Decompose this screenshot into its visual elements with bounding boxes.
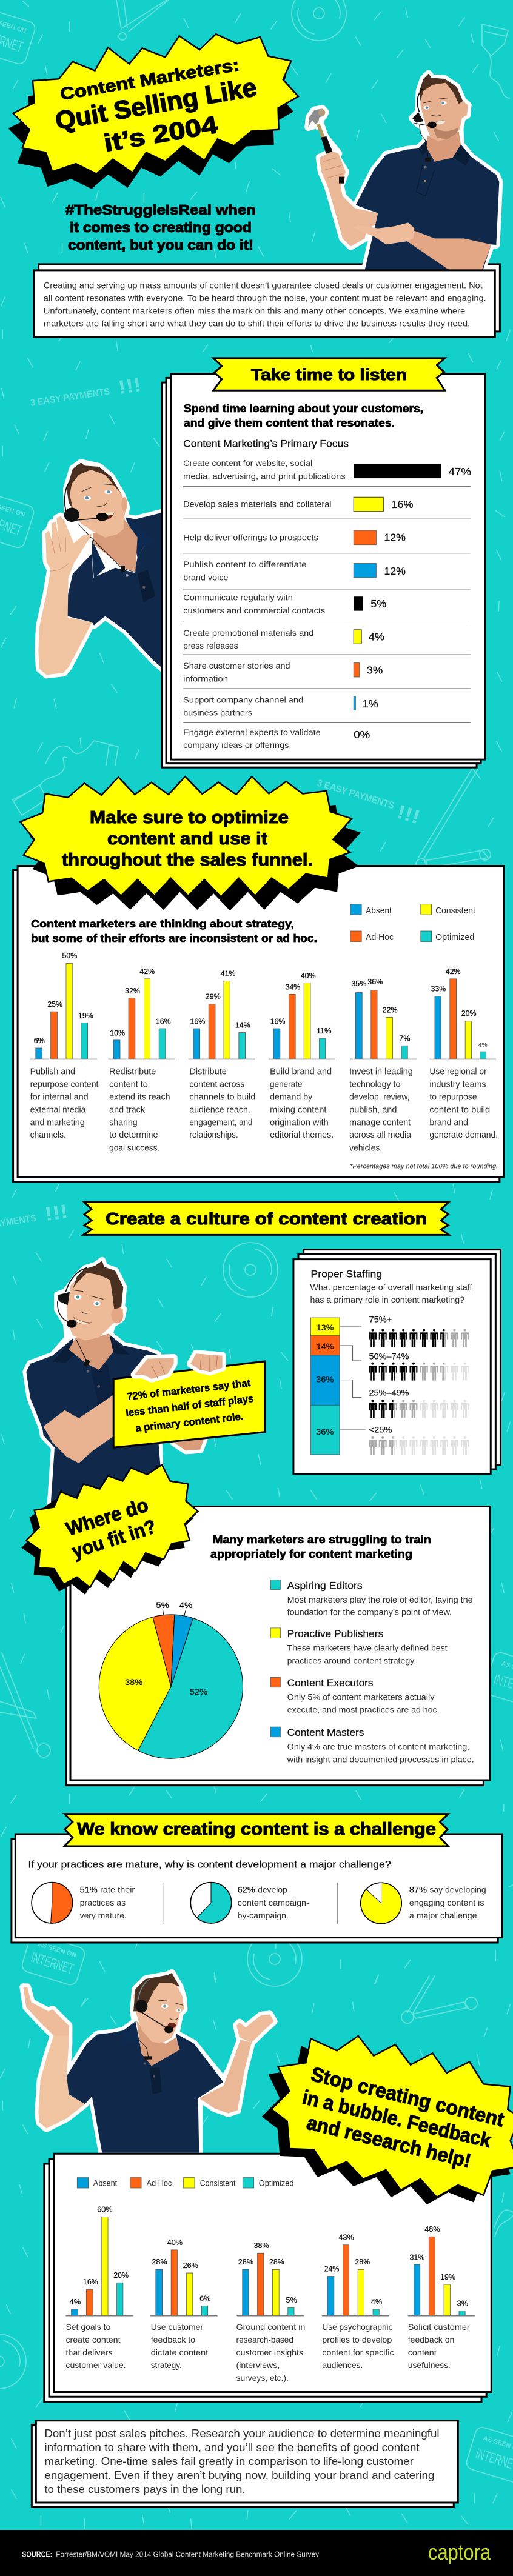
bar chart: focus rows: 12% [384,566,406,577]
chart value labels: 40% [301,972,316,981]
value labels: 38% [254,2241,269,2250]
value labels: 4% [371,2298,382,2306]
footer [0,2530,513,2576]
photo: man listening [38,462,168,675]
icon row: 25 to 49 percent people [369,1400,469,1418]
legend with descriptions: Only 5% of content marketers actually [287,1692,435,1702]
subheading: content marketers strategy [31,918,317,944]
source line: SOURCE: [22,2550,52,2559]
value labels: 3% [457,2299,468,2308]
icon: scooters [0,0,491,2023]
heading banner [213,358,445,390]
chart descriptions: feedback to [151,2335,195,2344]
bar chart: focus rows: Support company channel and [183,696,303,705]
folded arm [44,1395,113,1463]
stat: 51 percent [80,1885,135,1920]
lower arm and hand [407,230,491,270]
chart value labels: 42% [139,967,155,976]
raised arm and fist [320,151,378,247]
chart value labels: 35% [351,979,367,989]
chart value labels [34,952,488,1049]
bar chart: focus rows: Create promotional materials and [183,629,314,638]
chart descriptions: research-based [236,2335,293,2344]
panel: closing text [32,2421,458,2507]
chart descriptions: audience reach, [189,1106,250,1115]
value labels: 20% [113,2271,129,2280]
icon row: 50 to 74 percent people [369,1363,469,1381]
hammer [317,124,325,138]
bar chart: focus rows: Publish content to differentiate [183,561,307,570]
legend: Optimized [435,932,474,943]
chart descriptions: content across [189,1080,245,1089]
chart descriptions: that delivers [65,2347,113,2357]
bar chart: focus rows: media, advertising, and print publications [183,472,346,481]
legend: Absent [93,2178,118,2188]
title text: Quit Selling Like [53,73,259,135]
chart descriptions: channels. [30,1130,66,1140]
heading: we know creating content: We know creating content is a challenge [77,1820,436,1839]
chart descriptions: technology to [349,1080,401,1089]
sign text [125,1377,254,1434]
chart descriptions: publish, and [349,1106,397,1115]
legend with descriptions: Content Masters [287,1727,364,1738]
icon: three easy payments stamps: !!! [43,1200,69,1225]
shirt [67,2021,223,2153]
chart value labels: 14% [235,1021,250,1030]
chart descriptions: Redistribute [109,1067,156,1076]
section: where do you fit in [21,1465,490,1786]
heading: create a culture: Create a culture of content creation [106,1209,427,1228]
legend with descriptions: Content Executors [287,1677,374,1689]
shirt [26,1335,164,1507]
chart descriptions: Use regional or [429,1067,487,1076]
banner: create a culture [84,1202,449,1235]
stat: 62 percent: content campaign- [238,1898,309,1907]
pie labels: 4% [179,1600,192,1610]
chart descriptions: Set goals to [65,2322,110,2332]
chart value labels: 20% [461,1009,477,1018]
chart value labels: 32% [125,987,140,996]
burst headline: Make sure to optimize [90,808,289,827]
chart descriptions: editorial themes. [270,1130,334,1140]
chart value labels: 25% [47,1000,62,1009]
section: take time to listen [38,358,485,767]
stacked bar: 13% [317,1323,334,1332]
chart descriptions: Solicit customer [408,2322,470,2332]
title text [53,55,259,157]
chart descriptions: strategy. [151,2360,182,2370]
bar chart: focus rows: brand voice [183,573,229,582]
burst headline: throughout the sales funnel. [62,850,313,870]
burst text: and research help! [304,2111,473,2172]
legend with descriptions: Proactive Publishers [287,1628,383,1640]
stat: 62 percent: by-campaign. [238,1910,289,1920]
legend [77,2178,293,2188]
chart descriptions: brand and [429,1118,468,1127]
chart descriptions: Use psychographic [322,2322,392,2332]
bar charts: five feedback groups [65,2205,475,2383]
row labels [369,1315,409,1434]
pie: 87 percent [361,1883,401,1924]
source line [22,2550,319,2559]
chart descriptions: repurpose content [30,1080,99,1089]
pie labels: 5% [156,1600,169,1610]
panel: intro backing sheet [39,264,500,332]
chart descriptions: generate demand. [429,1130,498,1140]
sign text: 72% of marketers say that [126,1377,251,1403]
pie labels [156,1600,192,1616]
icon: three easy payments stamps: 3 EASY PAYMENTS [30,387,110,409]
banner [64,1814,448,1846]
legend: Absent [366,906,392,916]
chart value labels: 7% [399,1035,411,1043]
bar chart: focus rows: Create content for website, social [183,459,312,469]
chart descriptions: content to [109,1080,148,1089]
chart descriptions: manage content [349,1118,411,1127]
chart value labels: 41% [221,969,236,978]
photo: man holding sign [26,1261,204,1507]
value labels: 19% [440,2273,455,2281]
heading: many marketers struggling [210,1533,431,1560]
burst text: Where do [63,1493,151,1540]
chart value labels: 16% [156,1017,171,1026]
chart descriptions: and marketing [30,1118,85,1127]
chart value labels: 36% [367,978,383,987]
stat: 51 percent: rate their [100,1885,135,1895]
icon: three easy payments stamps: 3 EASY PAYMENTS [316,778,395,812]
chart descriptions: Invest in leading [349,1067,413,1076]
stat: 51 percent: very mature. [80,1910,127,1920]
icon: three easy payments stamps [0,373,423,1238]
burst text: you fit in? [69,1515,158,1563]
value labels: 24% [324,2264,339,2273]
hashtag subheading: #TheStruggleIsReal when [65,202,256,218]
chart value labels: 50% [62,952,78,961]
bar chart: focus rows: Engage external experts to validate [183,728,321,737]
row labels: <25% [369,1425,392,1434]
chart descriptions: Use customer [151,2322,203,2332]
bar chart: focus rows: 5% [370,598,386,610]
head [133,1979,184,2044]
heading: many marketers struggling: Many marketers are struggling to train [213,1533,431,1546]
icon row: 75 percent plus people [369,1329,469,1347]
bar chart: focus rows: Communicate regularly with [183,593,293,602]
chart value labels: 16% [190,1017,206,1026]
bar chart: focus rows: Develop sales materials and collateral [183,500,332,509]
stat: 62 percent: develop [258,1885,287,1895]
subheading: content marketers strategy: Content marketers are thinking about strategy, [31,918,294,930]
headset [138,1979,150,1999]
chart descriptions: (interviews, [236,2360,280,2370]
stat: 87 percent [409,1885,486,1920]
bar chart: focus rows: 0% [354,729,370,741]
staffing heading: Proper Staffing [311,1268,382,1280]
stat: 62 percent [238,1885,309,1920]
value labels: 5% [286,2296,297,2304]
chart descriptions: generate [270,1080,303,1089]
burst headline: content and use it [107,829,267,849]
chart descriptions: create content [65,2335,121,2344]
neck [426,132,461,162]
headset [417,89,423,112]
burst text [63,1493,158,1563]
value labels: 43% [338,2233,354,2242]
icon: as seen on internet stamps: AS SEEN ON [37,1941,77,1959]
value labels: 60% [97,2205,113,2214]
chart value labels: 33% [431,984,446,993]
chart descriptions: relationships. [189,1130,238,1140]
chart descriptions: Build brand and [270,1067,332,1076]
chart descriptions: and track [109,1106,145,1115]
subheading: spend time learning: Spend time learning about your customers, [184,402,423,415]
hashtag subheading: content, but you can do it! [68,237,253,253]
panel: feedback chart sheet [44,2154,491,2402]
chart descriptions: content for specific [322,2347,394,2357]
value labels: 4% [69,2298,81,2306]
bar chart: focus rows: 47% [449,466,471,478]
stat: 87 percent: 87% [409,1885,427,1895]
chart descriptions: across all media [349,1130,411,1140]
value labels [69,2205,468,2308]
legend: Ad Hoc [147,2178,172,2188]
chart descriptions: dictate content [151,2347,208,2357]
title text: it’s 2004 [102,112,220,157]
logo: captora: captora [428,2540,491,2564]
optimize burst [20,776,361,910]
chart descriptions: audiences. [322,2360,363,2370]
stat: 62 percent: 62% [238,1885,255,1895]
photo: man with hammer [308,74,499,270]
photo: man shrugging [23,1973,274,2153]
shirt [356,141,499,270]
chart descriptions: mixing content [270,1106,327,1115]
head [68,470,126,538]
stat: 51 percent: 51% [80,1885,98,1895]
row labels: 25%–49% [369,1388,409,1398]
icon: three easy payments stamps: !!! [116,373,142,398]
panel: proper staffing [293,1250,500,1474]
stacked bar: 36% [316,1375,334,1384]
chart descriptions: demand by [270,1092,312,1102]
stacked bar: 36% [316,1427,334,1436]
bar chart: focus rows: 4% [369,632,384,643]
shirt [67,511,168,673]
chart value labels: 29% [206,992,221,1001]
panel: closing text: to these customers pays in the long run. [44,2483,246,2495]
icon: three easy payments stamps: !!! [394,801,423,828]
row labels: 75%+ [369,1315,392,1324]
chart value labels: 10% [110,1029,125,1038]
burst headline [62,808,313,870]
value labels: 26% [183,2261,198,2270]
legend: Ad Hoc [366,932,394,943]
chart value labels: 34% [285,983,301,992]
bar chart: focus rows: customers and commercial contacts [183,606,325,616]
chart value labels: 16% [270,1017,286,1026]
panel: intro text [34,270,495,337]
legend: Consistent [435,906,475,916]
chart descriptions: engagement, and [189,1118,252,1127]
bar chart: focus rows: information [183,675,228,684]
bar chart: focus rows: 12% [384,532,406,544]
chart descriptions: content [408,2347,437,2357]
title text: Content Marketers: [59,55,241,104]
value labels: 28% [238,2258,253,2266]
sign: 72 percent callout [113,1353,265,1447]
hands gripping sign [135,1353,223,1379]
section: culture of content creation [26,1202,500,1507]
chart value labels: 22% [383,1006,398,1015]
panel: challenge sheet [12,1814,502,1943]
chart descriptions: channels to build [189,1092,255,1102]
legend: Consistent [200,2178,236,2188]
pie slice labels [125,1677,207,1697]
neck [93,519,138,572]
legend [350,904,475,943]
panel: maturity sheet [67,1506,490,1786]
value labels: 16% [83,2278,98,2286]
burst text [300,2063,506,2172]
chart descriptions: Publish and [30,1067,75,1076]
icon: as seen on internet stamps: INTERNET [29,1949,76,1978]
stacked bar: 14% [317,1341,334,1351]
chart value labels: 19% [78,1012,93,1021]
pie slice labels: 52% [190,1687,207,1697]
subheading: spend time learning: and give them content that resonates. [184,417,395,429]
bar chart: focus rows [183,459,471,750]
neck [136,2020,180,2066]
chart descriptions: to repurpose [429,1092,477,1102]
chart descriptions [65,2322,470,2383]
chart descriptions: content to build [429,1106,490,1115]
value labels: 28% [269,2258,284,2266]
staffing heading [310,1268,472,1304]
icon: discs [0,0,346,2389]
section: optimize content [13,776,504,1182]
stat: 51 percent: practices as [80,1898,126,1907]
chart value labels: 4% [478,1042,488,1049]
pie chart: marketer types [99,1615,243,1758]
panel: primary focus chart sheet [162,358,485,767]
arm and hand [38,516,93,675]
value labels: 31% [409,2253,424,2261]
value labels: 6% [200,2294,210,2303]
bar charts: six strategy groups [36,963,486,1059]
chart descriptions: surveys, etc.). [236,2373,289,2383]
hashtag subheading: it comes to creating good [70,219,252,235]
stop creating burst [262,2036,513,2204]
stacked bar [311,1318,340,1455]
subheading: content marketers strategy: but some of their efforts are inconsistent or ad hoc. [31,932,317,944]
head [420,81,468,141]
panel: strategy chart sheet [13,866,504,1182]
pie slice labels: 38% [125,1677,142,1687]
legend: Optimized [259,2178,293,2188]
head [67,1269,123,1341]
heading: take time to listen: Take time to listen [251,365,407,384]
value labels: 28% [355,2258,370,2266]
chart descriptions: extend its reach [109,1092,170,1102]
burst text: Stop creating content [309,2063,506,2131]
chart value labels: 6% [34,1036,45,1046]
legend with descriptions: practices around content strategy. [287,1656,416,1665]
headset [65,1268,87,1292]
connectors [340,1327,366,1430]
bar chart: focus rows: press releases [183,642,238,651]
chart descriptions: feedback on [408,2335,454,2344]
chart descriptions: sharing [109,1118,138,1127]
title burst [8,34,298,189]
chart descriptions [30,1067,498,1153]
lower hand [174,1438,204,1450]
sign text: a primary content role. [135,1410,244,1434]
legend with descriptions: Aspiring Editors [287,1580,363,1591]
chart descriptions: develop, review, [349,1092,409,1102]
bar chart: focus rows: company ideas or offerings [183,741,289,750]
chart descriptions: customer value. [65,2360,126,2370]
sign text: less than half of staff plays [125,1393,254,1419]
subheading: spend time learning [184,402,423,429]
bar chart: focus rows: 1% [363,698,378,710]
section: feedback and research [23,1973,513,2507]
bar chart: focus rows: 16% [392,499,413,510]
bar chart: focus rows: business partners [183,709,252,718]
bar chart: focus rows: Share customer stories and [183,662,290,671]
chart descriptions: Distribute [189,1067,227,1076]
headset [65,482,70,513]
chart descriptions: usefulness. [408,2360,451,2370]
chart descriptions: industry teams [429,1080,486,1089]
value labels: 48% [424,2225,440,2234]
section: creating content is a challenge [12,1814,502,1943]
source line: Forrester/BMA/OMI May 2014 Global Content Marketing Benchmark Online Survey [56,2550,319,2559]
pie: 62 percent [190,1883,232,1923]
neck [69,1333,113,1370]
chart descriptions: origination with [270,1118,329,1127]
chart descriptions: profiles to develop [322,2335,392,2344]
dividers [164,1883,337,1924]
legend with descriptions [270,1580,474,1764]
hashtag subheading [65,202,256,253]
pie: 51 percent [32,1883,73,1923]
chart descriptions: for internal and [30,1092,89,1102]
chart descriptions: goal success. [109,1143,159,1153]
bar chart: focus rows: Help deliver offerings to prospects [183,533,318,542]
chart descriptions: Ground content in [236,2322,305,2332]
chart value labels: 11% [317,1027,332,1036]
row labels: 50%–74% [369,1352,409,1361]
value labels: 28% [152,2258,167,2266]
icon row: under 25 percent people [369,1436,469,1455]
heading: many marketers struggling: appropriately for content marketing [210,1547,412,1560]
arms and hands [38,2032,85,2129]
chart descriptions: external media [30,1106,86,1115]
bar chart: focus rows: 3% [367,664,383,676]
section: hero [8,34,500,337]
chart descriptions: customer insights [236,2347,303,2357]
value labels: 40% [167,2238,183,2247]
where do you fit in burst [21,1465,198,1595]
chart descriptions: to determine [109,1130,158,1140]
chart value labels: 42% [446,967,461,976]
chart title: Content Marketing’s Primary Focus [183,438,349,450]
burst text: in a bubble. Feedback [300,2086,494,2152]
chart descriptions: vehicles. [349,1143,382,1153]
